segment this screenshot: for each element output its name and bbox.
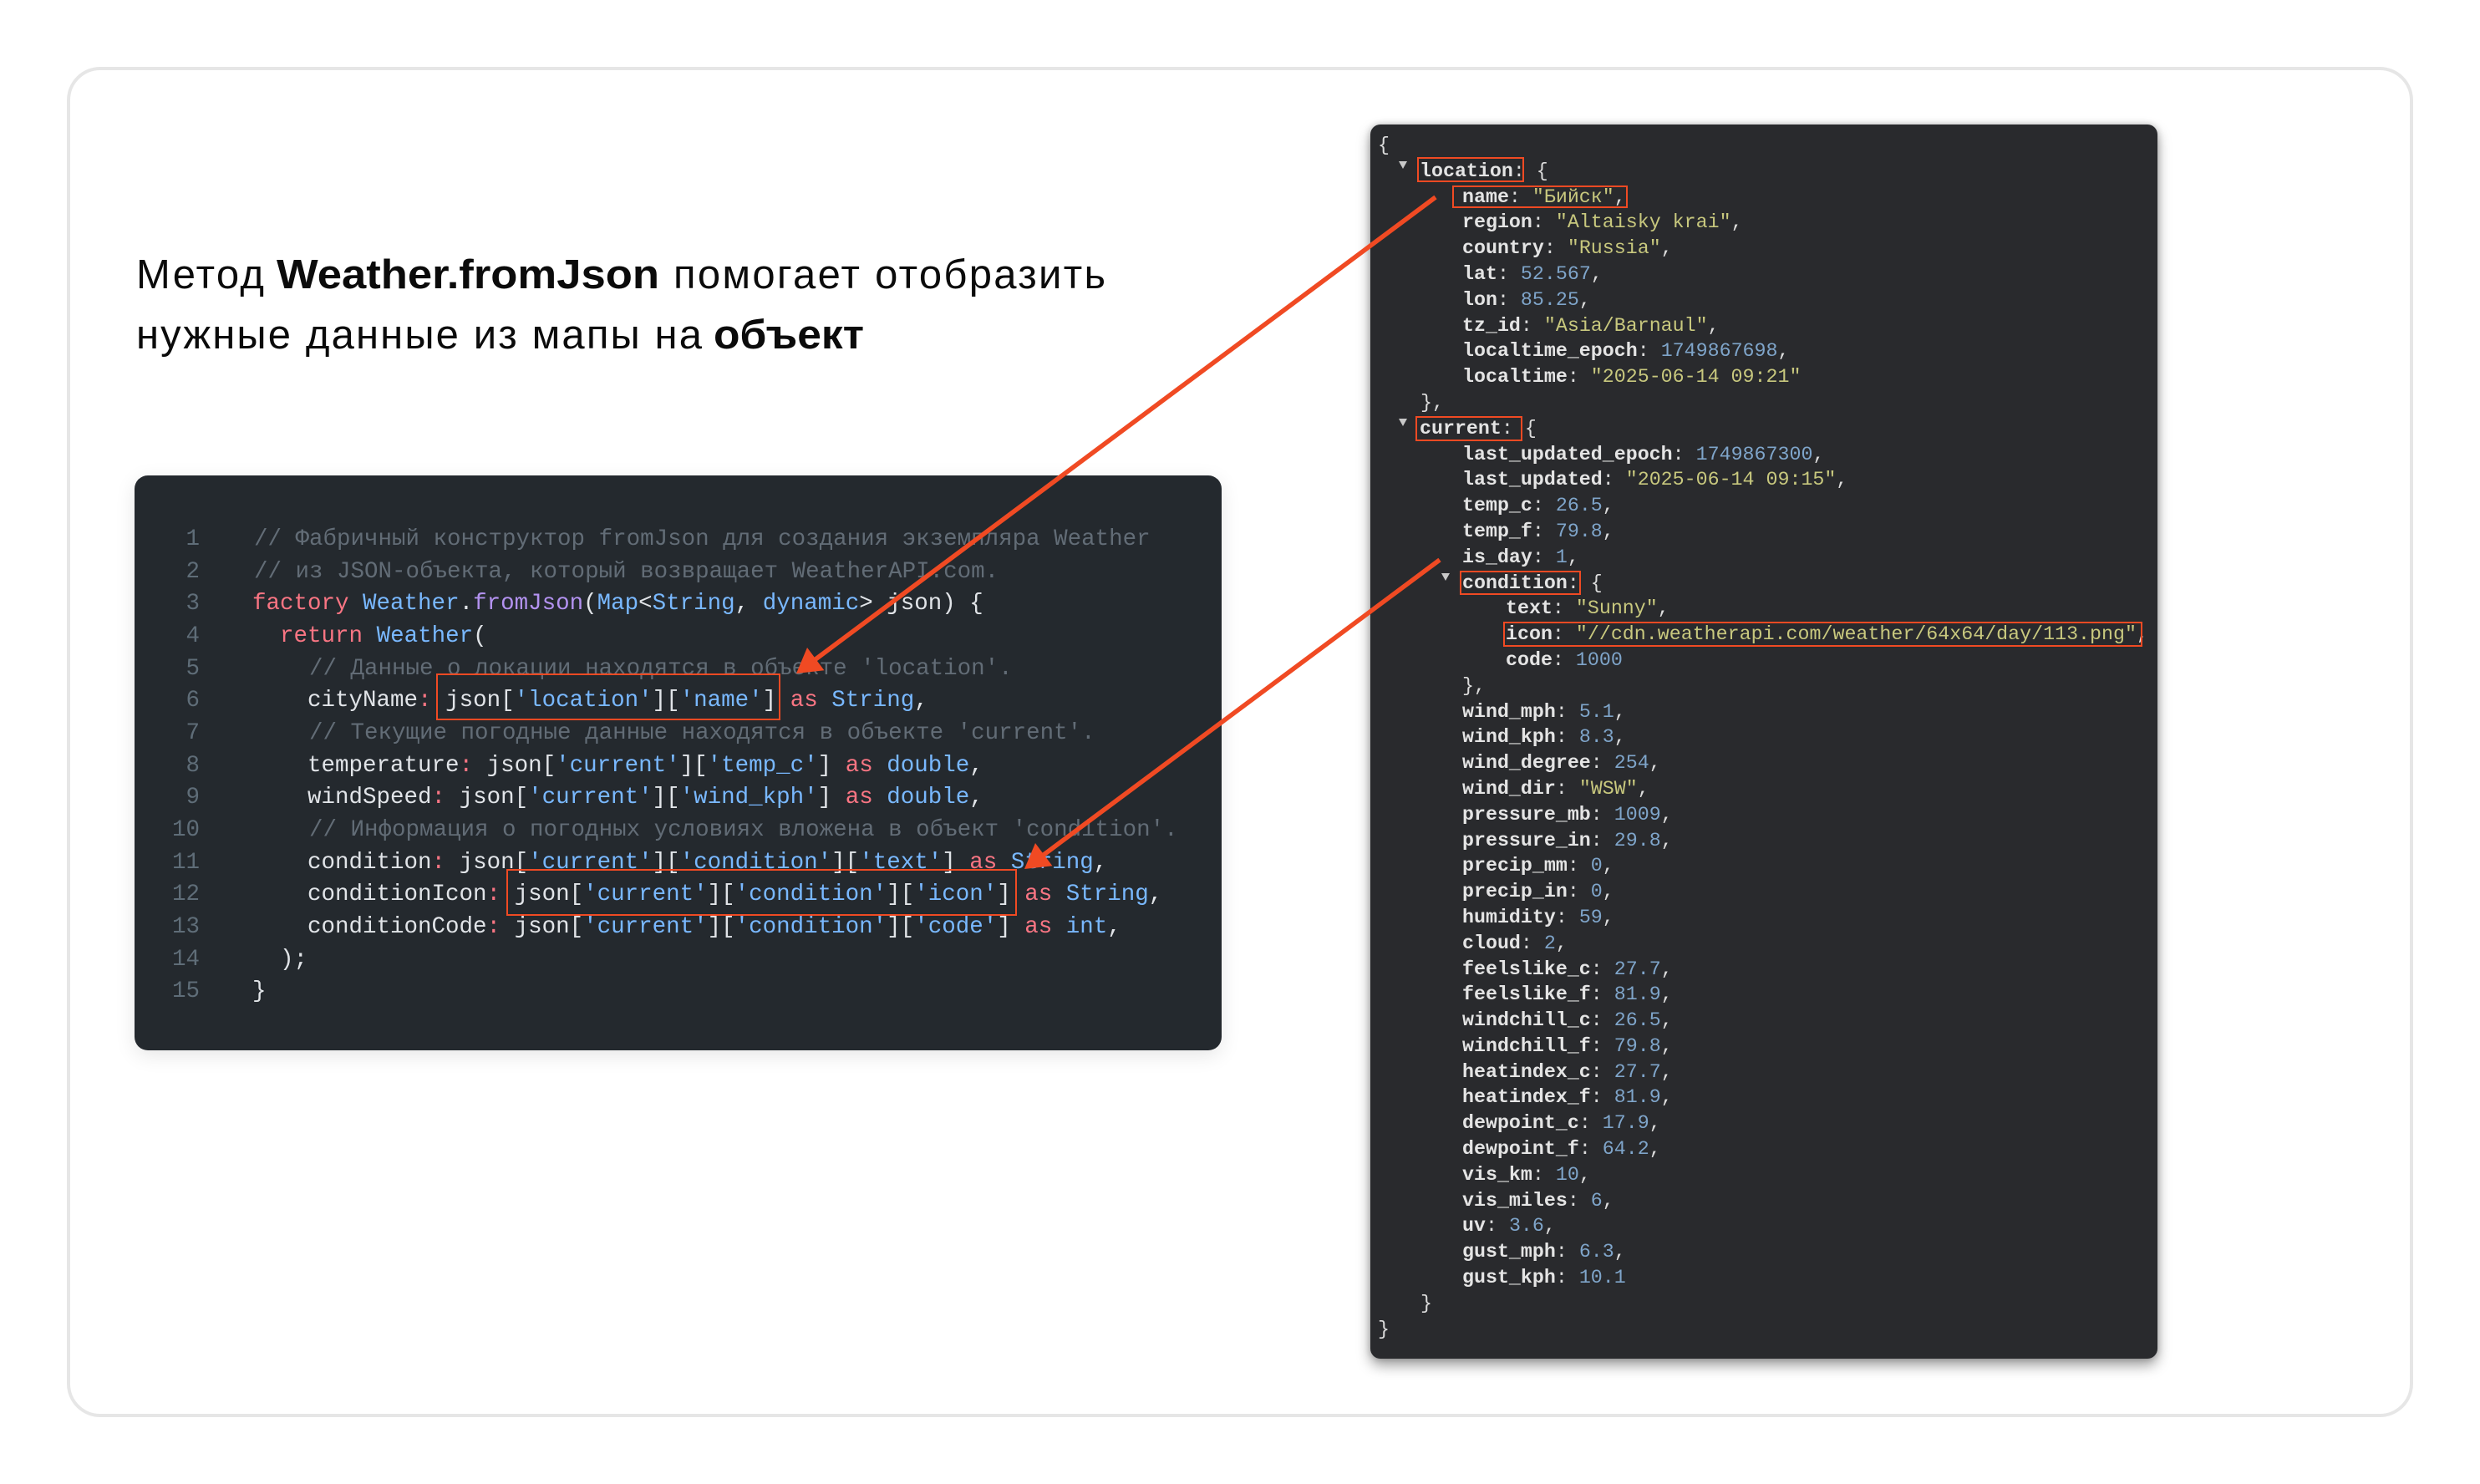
JSON lines: country: "Russia", bbox=[1462, 237, 1673, 259]
code lines: cityName: json['location']['name'] as String, bbox=[307, 688, 928, 714]
JSON lines: icon: "//cdn.weatherapi.com/weather/64x64/day/113.png", bbox=[1506, 623, 2148, 645]
icon: condition disclosure triangle bbox=[1441, 573, 1450, 581]
JSON lines: is_day: 1, bbox=[1462, 546, 1579, 568]
heading text: Метод bbox=[136, 252, 264, 297]
JSON lines: localtime_epoch: 1749867698, bbox=[1462, 340, 1789, 362]
JSON lines: precip_in: 0, bbox=[1462, 881, 1614, 902]
highlight: location key bbox=[1417, 157, 1524, 182]
JSON lines: dewpoint_c: 17.9, bbox=[1462, 1112, 1661, 1134]
panel: dart code bbox=[135, 475, 1222, 1050]
JSON lines: pressure_mb: 1009, bbox=[1462, 804, 1673, 826]
JSON lines: wind_dir: "WSW", bbox=[1462, 778, 1649, 800]
highlight: condition icon expression bbox=[506, 869, 1017, 916]
JSON lines: precip_mm: 0, bbox=[1462, 855, 1614, 877]
JSON lines: temp_c: 26.5, bbox=[1462, 495, 1614, 516]
code lines: // Текущие погодные данные находятся в объекте 'current'. bbox=[309, 720, 1095, 746]
JSON lines: uv: 3.6, bbox=[1462, 1215, 1556, 1237]
highlight: icon value bbox=[1503, 622, 2142, 647]
JSON lines: region: "Altaisky krai", bbox=[1462, 211, 1743, 233]
code lines: } bbox=[252, 978, 267, 1004]
JSON lines: windchill_f: 79.8, bbox=[1462, 1035, 1673, 1057]
JSON lines: { bbox=[1378, 135, 1390, 156]
highlight: current key bbox=[1415, 416, 1522, 441]
JSON lines: } bbox=[1378, 1319, 1390, 1340]
JSON lines: feelslike_f: 81.9, bbox=[1462, 983, 1673, 1005]
highlight: condition key bbox=[1460, 571, 1581, 595]
JSON lines: pressure_in: 29.8, bbox=[1462, 830, 1673, 851]
code lines: // из JSON-объекта, который возвращает WeatherAPI.com. bbox=[254, 559, 999, 585]
JSON lines: lon: 85.25, bbox=[1462, 289, 1591, 311]
JSON lines: name: "Бийск", bbox=[1462, 186, 1626, 208]
heading text bbox=[136, 252, 1105, 358]
code lines: // Данные о локации находятся в объекте 'location'. bbox=[309, 656, 1013, 682]
JSON lines: text: "Sunny", bbox=[1506, 597, 1669, 619]
code lines: temperature: json['current']['temp_c'] as double, bbox=[307, 753, 983, 779]
code lines: // Информация о погодных условиях вложена в объект 'condition'. bbox=[309, 817, 1178, 843]
heading text: объект bbox=[714, 313, 864, 358]
JSON lines: heatindex_f: 81.9, bbox=[1462, 1086, 1673, 1108]
JSON lines: wind_kph: 8.3, bbox=[1462, 726, 1626, 748]
JSON lines: code: 1000 bbox=[1506, 649, 1623, 671]
JSON lines: }, bbox=[1420, 392, 1444, 414]
JSON lines: tz_id: "Asia/Barnaul", bbox=[1462, 315, 1720, 337]
JSON lines: dewpoint_f: 64.2, bbox=[1462, 1138, 1661, 1160]
code lines: return Weather( bbox=[280, 623, 487, 649]
highlight: name value bbox=[1452, 186, 1628, 208]
code lines: windSpeed: json['current']['wind_kph'] as double, bbox=[307, 785, 983, 811]
JSON lines: gust_mph: 6.3, bbox=[1462, 1241, 1626, 1263]
JSON lines: current: { bbox=[1420, 418, 1537, 440]
JSON lines: wind_mph: 5.1, bbox=[1462, 701, 1626, 723]
code lines: conditionIcon: json['current']['condition']['icon'] as String, bbox=[307, 882, 1162, 907]
code lines: conditionCode: json['current']['condition']['code'] as int, bbox=[307, 914, 1121, 940]
JSON lines: vis_km: 10, bbox=[1462, 1164, 1591, 1186]
code lines: condition: json['current']['condition']['text'] as String, bbox=[307, 850, 1107, 876]
JSON lines: heatindex_c: 27.7, bbox=[1462, 1061, 1673, 1083]
JSON lines: humidity: 59, bbox=[1462, 907, 1614, 928]
JSON lines: condition: { bbox=[1462, 572, 1603, 594]
JSON lines: } bbox=[1420, 1293, 1432, 1314]
heading text: нужные данные из мапы на bbox=[136, 313, 703, 358]
JSON lines: last_updated_epoch: 1749867300, bbox=[1462, 444, 1824, 465]
line numbers: 1 2 3 4 5 6 7 8 9 10 11 12 13 14 15 bbox=[172, 526, 200, 1004]
heading text: Weather.fromJson bbox=[277, 252, 659, 297]
JSON lines: vis_miles: 6, bbox=[1462, 1190, 1614, 1212]
JSON lines: localtime: "2025-06-14 09:21" bbox=[1462, 366, 1801, 388]
JSON lines: windchill_c: 26.5, bbox=[1462, 1009, 1673, 1031]
JSON lines: gust_kph: 10.1 bbox=[1462, 1267, 1626, 1288]
JSON lines bbox=[1378, 135, 2148, 1340]
JSON lines: cloud: 2, bbox=[1462, 933, 1568, 954]
icon: location disclosure triangle bbox=[1399, 161, 1407, 169]
JSON lines: location: { bbox=[1420, 160, 1548, 182]
code lines: // Фабричный конструктор fromJson для создания экземпляра Weather bbox=[254, 526, 1151, 552]
highlight: location name expression bbox=[436, 673, 780, 720]
icon: current disclosure triangle bbox=[1399, 419, 1407, 426]
code lines: ); bbox=[280, 947, 307, 973]
JSON lines: lat: 52.567, bbox=[1462, 263, 1603, 285]
panel: JSON response bbox=[1370, 125, 2157, 1359]
JSON lines: feelslike_c: 27.7, bbox=[1462, 958, 1673, 979]
code lines bbox=[252, 526, 1178, 1004]
code lines: factory Weather.fromJson(Map<String, dynamic> json) { bbox=[252, 591, 983, 617]
JSON lines: last_updated: "2025-06-14 09:15", bbox=[1462, 469, 1847, 490]
JSON lines: temp_f: 79.8, bbox=[1462, 521, 1614, 542]
JSON lines: wind_degree: 254, bbox=[1462, 752, 1661, 774]
JSON lines: }, bbox=[1462, 675, 1486, 697]
heading text: помогает отобразить bbox=[673, 252, 1105, 297]
